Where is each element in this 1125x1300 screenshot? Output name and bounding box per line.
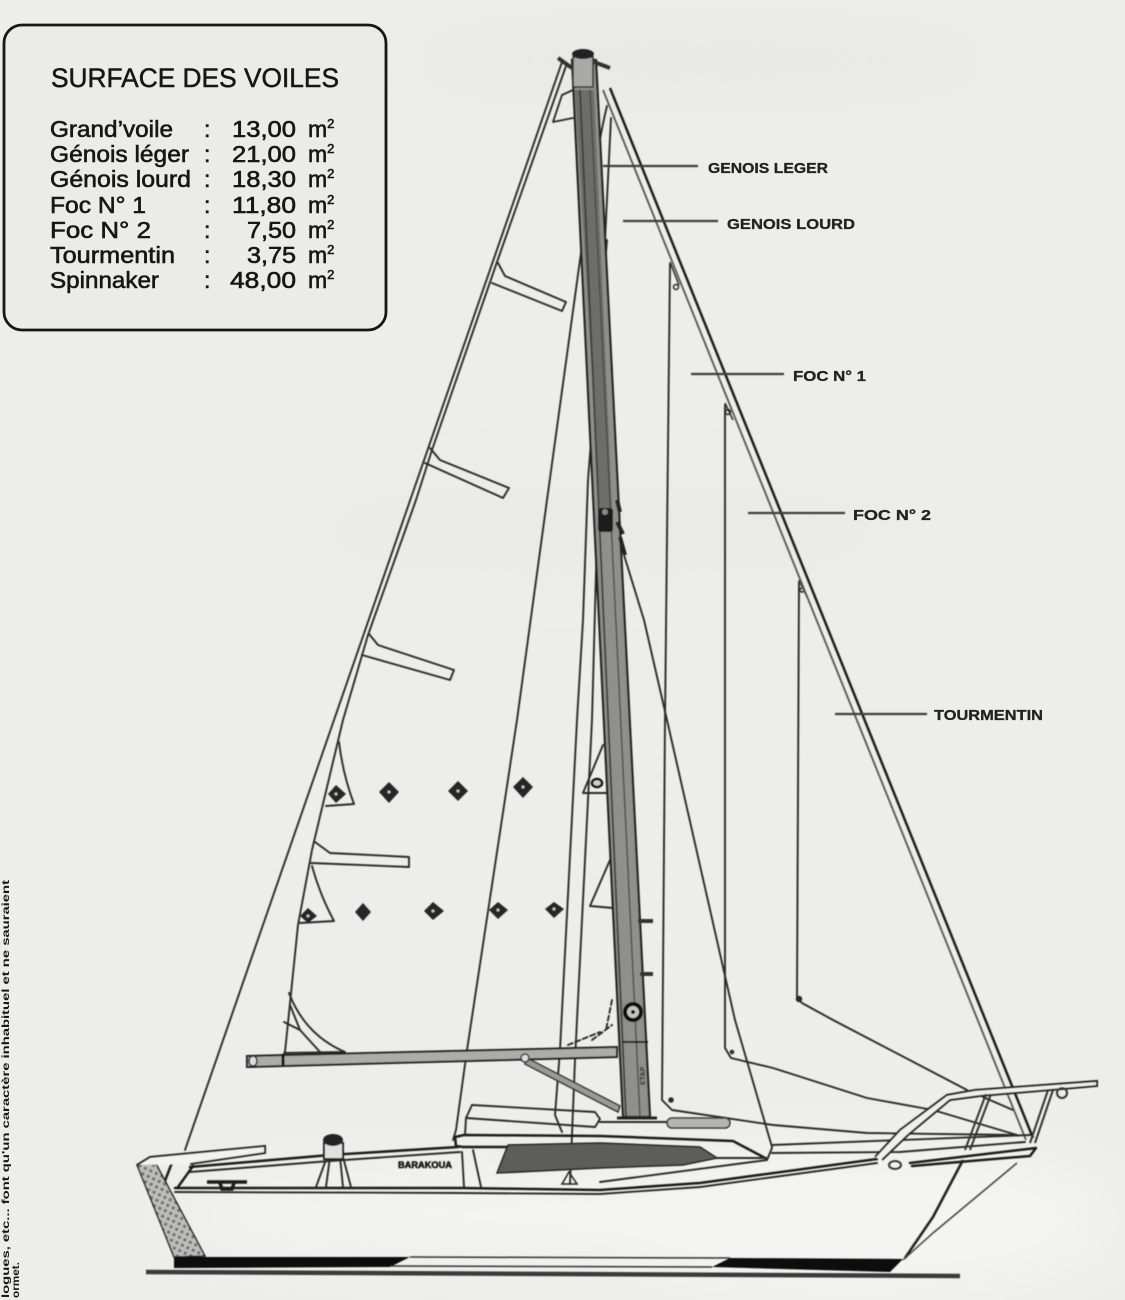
reef points: [300, 777, 564, 923]
leader: genois leger: [603, 165, 698, 167]
table: sail names: Génois léger: [50, 141, 189, 167]
table: separators: :: [204, 242, 210, 268]
table: separators: :: [204, 217, 210, 243]
table: units: m: [308, 267, 327, 293]
mast: ETAP: [640, 1067, 647, 1085]
table: sail names: Foc N° 2: [50, 217, 151, 243]
panel heading: SURFACE DES VOILES: [51, 63, 339, 93]
table: units: m: [308, 217, 327, 243]
genoa sails: [453, 106, 611, 1184]
boom: [247, 1047, 617, 1067]
table: sail names: Tourmentin: [50, 242, 175, 268]
table: units: 2: [327, 141, 334, 156]
table: separators: :: [204, 166, 210, 192]
leader: foc 2: [748, 512, 845, 514]
table: units: 2: [327, 166, 334, 181]
table: areas: 48,00: [230, 267, 296, 293]
mainsail battens: [311, 263, 566, 867]
cabin: [455, 1105, 772, 1182]
shroud: [624, 555, 772, 1147]
table: areas: 18,30: [232, 166, 296, 192]
label: foc no 2: FOC N° 2: [853, 507, 931, 524]
mast fittings: [592, 779, 653, 1020]
fore hatch: [667, 1118, 730, 1128]
sail head rings: [669, 262, 807, 1102]
table: sail names: [50, 116, 191, 293]
leader: foc 1: [691, 373, 784, 375]
label: genois leger: GENOIS LEGER: [708, 160, 828, 177]
table: units: m: [308, 166, 327, 192]
table: units: m: [308, 242, 327, 268]
table: units: [308, 116, 334, 293]
fore deck lines: [772, 1135, 1030, 1153]
leader: genois lourd: [623, 220, 718, 222]
keel and ground line: [146, 1257, 960, 1276]
mast: [553, 49, 657, 1118]
table: units: 2: [327, 217, 334, 232]
mainsail reef patches: [284, 742, 613, 1053]
panel: sail areas: [4, 25, 386, 330]
label: tourmentin: TOURMENTIN: [934, 707, 1043, 724]
table: units: m: [308, 141, 327, 167]
ventilator and legs: [316, 1134, 351, 1187]
table: separators: :: [204, 141, 210, 167]
table: units: 2: [327, 242, 334, 257]
hull outline: [163, 1147, 1036, 1260]
table: units: 2: [327, 116, 334, 131]
label: foc no 1: FOC N° 1: [793, 368, 866, 385]
boom vang: [521, 1054, 620, 1112]
label: genois lourd: GENOIS LOURD: [727, 216, 855, 233]
table: separators: :: [204, 267, 210, 293]
table: units: 2: [327, 192, 334, 207]
table: sail names: Grand’voile: [50, 116, 173, 142]
table: areas: 3,75: [247, 242, 296, 268]
table: separators: :: [204, 192, 210, 218]
table: units: m: [308, 192, 327, 218]
tiller: [207, 1182, 247, 1189]
table: areas: 21,00: [232, 141, 296, 167]
table: sail names: Spinnaker: [50, 267, 159, 293]
bow pulpit: [875, 1081, 1097, 1169]
table: sail names: Génois lourd: [50, 166, 191, 192]
table: separators: [204, 116, 210, 293]
mainsail leech and backstay: [185, 62, 566, 1150]
table: areas: 11,80: [232, 192, 296, 218]
table: separators: :: [204, 116, 210, 142]
table: units: 2: [327, 267, 334, 282]
forestay: [603, 88, 1033, 1140]
sheet block on the chainplate: [562, 1172, 577, 1184]
table: sail names: Foc N° 1: [50, 192, 146, 218]
table: units: m: [308, 116, 327, 142]
leader: tourmentin: [835, 713, 927, 715]
margin text from the adjacent page: [1, 879, 22, 1298]
cabin window: [497, 1143, 717, 1173]
table: areas: 13,00: [232, 116, 296, 142]
margin text from the adjacent page: logues, etc... font qu'un caractère inhabituel et ne sauraient: [1, 879, 12, 1298]
table: areas: 7,50: [247, 217, 296, 243]
jib no. 2: [725, 405, 1017, 1135]
margin text from the adjacent page: ormet.: [11, 1262, 22, 1298]
jib no. 1: [662, 264, 1017, 1135]
transom and stern pushpit: [137, 1146, 265, 1257]
table: areas: [230, 116, 296, 293]
boat name: BARAKOUA: [398, 1160, 453, 1170]
storm jib: [797, 582, 1013, 1110]
